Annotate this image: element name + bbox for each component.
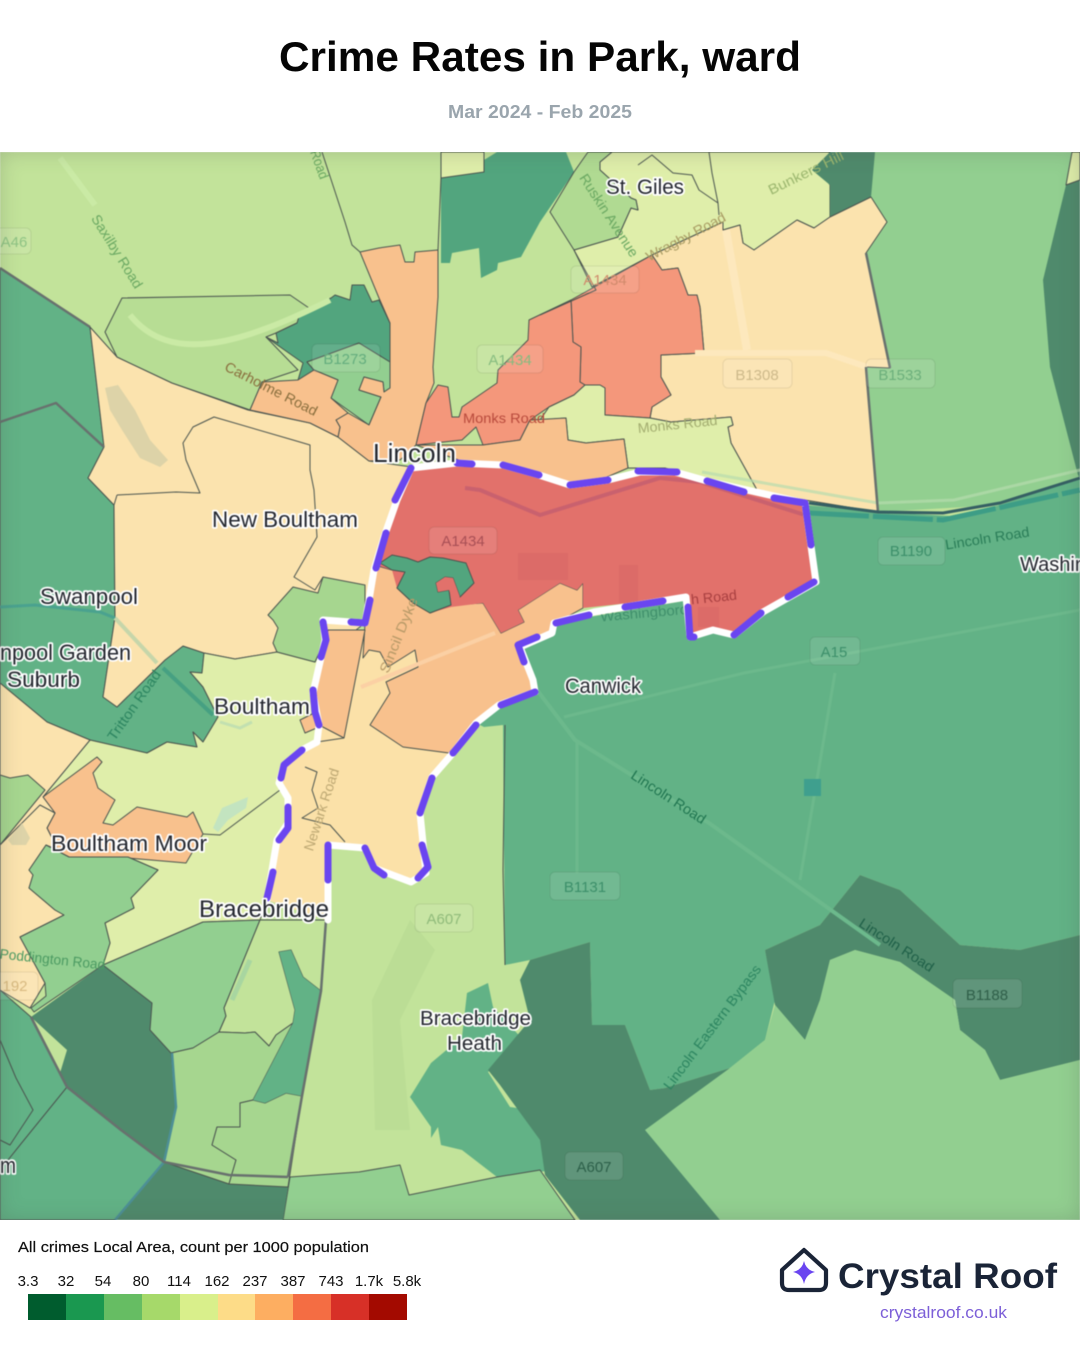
title: Crime Rates in Park, ward <box>279 33 801 80</box>
place names: Bracebridge <box>199 896 329 923</box>
place names: New Boultham <box>212 507 358 532</box>
area: B1273 green <box>307 343 390 425</box>
road name labels: Ruskin Avenue <box>576 171 642 260</box>
area: mid light green south <box>164 1023 293 1184</box>
legend values <box>18 1273 422 1290</box>
road name labels: Newark Road <box>300 766 342 853</box>
legend values: 387 <box>280 1273 306 1290</box>
area: bottom dark <box>115 1162 288 1220</box>
road shield labels: B1308 <box>735 367 779 384</box>
area boundary lines <box>0 152 1080 1177</box>
area: south-east dark <box>765 875 1080 1080</box>
road name labels: Road <box>307 147 332 181</box>
road name labels: Poddington Road <box>0 946 106 973</box>
legend values: 54 <box>95 1273 111 1290</box>
road shield labels: B1533 <box>878 367 922 384</box>
area: south-east large green <box>476 478 1080 1090</box>
road shields <box>0 228 1022 1180</box>
area: north-west green <box>266 285 390 380</box>
area: bottom mid green <box>283 1165 575 1220</box>
road name labels: Sincil Dyke <box>376 595 421 675</box>
ward darker blocks <box>518 553 719 627</box>
legend values: 3.3 <box>18 1273 38 1290</box>
road name labels: Lincoln Road <box>944 524 1030 553</box>
road name labels: Carholme Road <box>222 358 320 419</box>
area: far-west cream <box>0 683 90 836</box>
road name labels: h Road <box>690 587 738 607</box>
road name labels: Washingboro <box>600 601 689 624</box>
legend values: 32 <box>58 1273 74 1290</box>
area: cream west <box>88 327 412 707</box>
area: Monks pale <box>540 385 757 490</box>
darker band in A607 field <box>372 920 435 1130</box>
legend values: 5.8k <box>393 1273 422 1290</box>
legend title: All crimes Local Area, count per 1000 population <box>18 1239 369 1256</box>
place names: Swanpool <box>40 584 138 609</box>
road name labels: Monks Road <box>637 412 718 436</box>
area: Bracebridge mid green <box>103 920 260 1053</box>
legend values: 237 <box>242 1273 268 1290</box>
road name labels: Tritton Road <box>104 667 164 743</box>
road shield labels: B1273 <box>323 351 367 368</box>
grey lake <box>105 385 168 467</box>
road shield labels: A15 <box>821 644 847 661</box>
place names: Boultham Moor <box>51 831 207 856</box>
area: enclave red <box>436 577 460 597</box>
place names: Canwick <box>565 675 641 698</box>
area: south central dark <box>488 942 730 1220</box>
road shield labels: A1434 <box>583 272 627 289</box>
road shield labels: B1131 <box>564 879 606 896</box>
area: east mid green <box>866 152 1080 512</box>
place names <box>0 176 1080 1178</box>
road shield labels: A607 <box>576 1159 612 1176</box>
area: ward enclave green <box>380 555 474 613</box>
area: west green <box>0 268 218 753</box>
grey pond <box>8 823 30 845</box>
area: far-west cream lower <box>1 804 55 844</box>
place names: Bracebridge <box>420 1008 531 1030</box>
logo <box>782 1250 1057 1322</box>
area: Carholme peach <box>250 370 348 437</box>
legend colour scale <box>28 1294 407 1320</box>
area: south-west dark <box>31 965 176 1162</box>
ward boundary: purple dashes <box>267 463 814 898</box>
small teal square <box>804 779 821 796</box>
area: St Giles pale <box>574 152 830 287</box>
area: Heath green <box>410 983 555 1177</box>
road shield labels: A46 <box>1 234 27 251</box>
logo url: crystalroof.co.uk <box>880 1304 1008 1322</box>
St Giles inner cell lines <box>638 152 719 215</box>
area: north top green <box>441 152 574 278</box>
icon: house with star <box>782 1250 826 1290</box>
area: Bracebridge light green <box>219 920 326 1046</box>
area: north-east dark <box>812 152 875 217</box>
subtitle: date range: Mar 2024 - Feb 2025 <box>448 102 632 122</box>
area: Monks peach <box>416 418 628 487</box>
place names: Heath <box>447 1033 502 1055</box>
road shield labels: B1190 <box>890 543 932 560</box>
area: far-west light green <box>0 775 45 845</box>
place names: Lincoln <box>373 438 456 468</box>
area: strip green <box>253 950 321 1103</box>
area: ward high-crime red <box>376 463 816 637</box>
area: ward south peach <box>363 565 583 753</box>
legend values: 114 <box>167 1273 191 1290</box>
area: south-east mid green <box>640 950 1080 1220</box>
area: far-east dark <box>1043 180 1080 478</box>
road name labels: Lincoln Road <box>856 915 937 975</box>
area: Carholme green <box>105 295 309 410</box>
area: Boultham Moor peach <box>43 757 203 863</box>
road shield labels: A1434 <box>441 533 485 550</box>
legend values: 1.7k <box>355 1273 384 1290</box>
road shield labels: A1434 <box>488 352 532 369</box>
place names: npool Garden <box>0 640 131 665</box>
area: west lower green <box>0 990 164 1220</box>
road shield labels: 192 <box>2 978 28 995</box>
rivers and roads <box>0 158 1080 1220</box>
ward boundary: white line <box>267 463 816 920</box>
place names: Suburb <box>7 667 80 692</box>
road shield labels <box>1 234 1008 1176</box>
road name labels <box>0 147 1030 1093</box>
logo wordmark: Crystal Roof <box>838 1257 1057 1296</box>
area: central light green <box>268 577 365 662</box>
area: Ruskin green <box>550 152 638 250</box>
area: west mid green <box>20 845 158 1012</box>
area: far-east pale <box>1066 152 1080 185</box>
road name labels: Wragby Road <box>643 209 728 264</box>
area: east cream <box>650 197 890 512</box>
railway in ward <box>465 478 805 515</box>
road name labels: Lincoln Eastern Bypass <box>660 961 764 1093</box>
area: north pale patch <box>441 152 484 178</box>
legend <box>18 1239 422 1320</box>
road name labels: Bunkers Hill <box>765 147 846 198</box>
area: north peach <box>336 245 438 461</box>
road name labels: Monks Road <box>463 410 545 426</box>
area: Monks salmon <box>416 300 585 445</box>
area: small peach <box>300 712 319 733</box>
Boultham pond and drain <box>213 797 248 832</box>
legend values: 162 <box>204 1273 230 1290</box>
road shield labels: B1188 <box>966 987 1008 1004</box>
map <box>0 147 1080 1220</box>
road name labels: Saxilby Road <box>88 211 146 291</box>
area: mid light green south two <box>212 1093 302 1187</box>
road name labels: Lincoln Road <box>628 767 709 827</box>
place names: Boultham <box>214 694 310 719</box>
area: ward left peach <box>313 630 365 738</box>
area: ward south cream <box>267 623 449 920</box>
place names: St. Giles <box>606 176 684 199</box>
area: Boultham pale <box>43 640 325 965</box>
road shield labels: A607 <box>426 911 462 928</box>
legend values: 80 <box>133 1273 149 1290</box>
place names: m <box>0 1153 16 1178</box>
area: north-east salmon <box>571 255 704 418</box>
legend values: 743 <box>318 1273 344 1290</box>
